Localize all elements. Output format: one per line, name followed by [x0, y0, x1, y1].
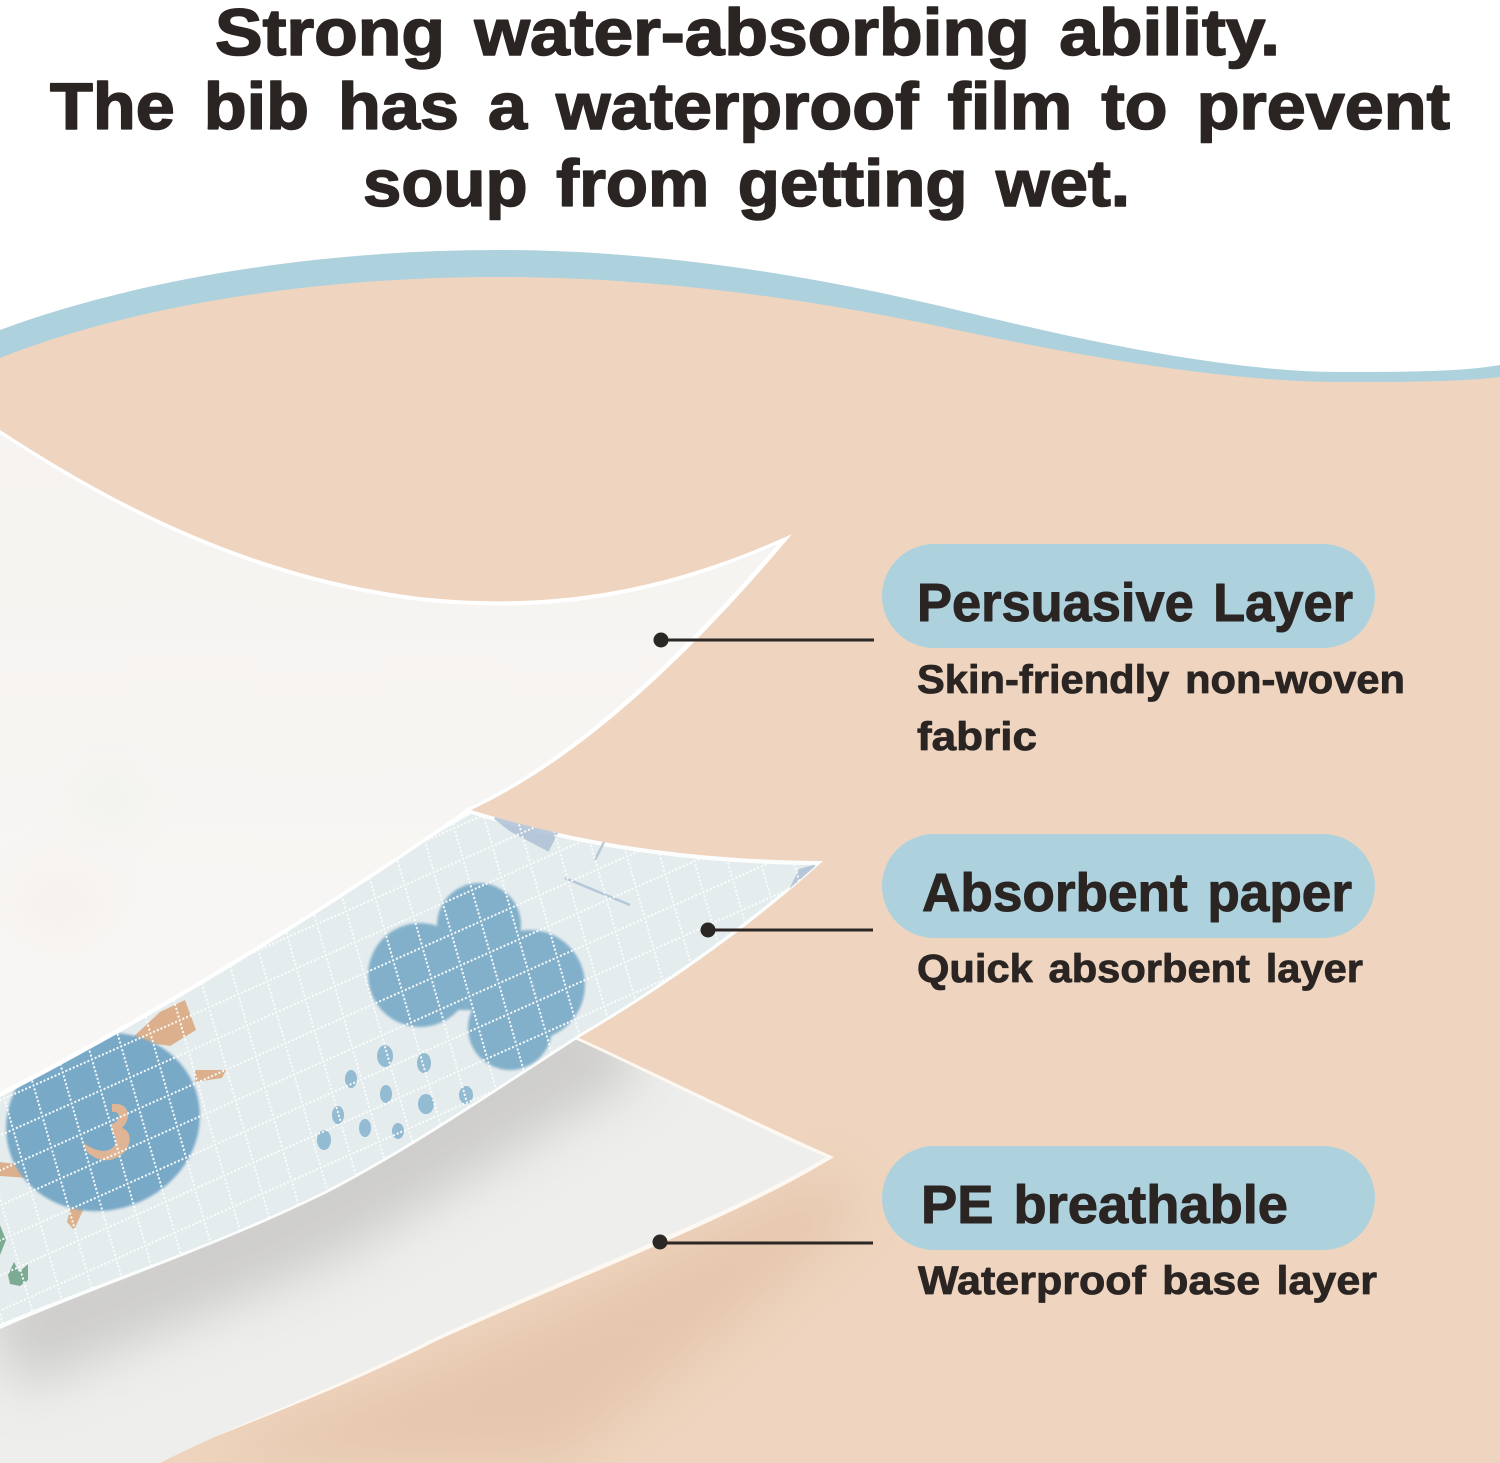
label: Persuasive Layer — [882, 544, 1405, 759]
icon: blue sheep — [0, 1000, 226, 1238]
layer: Absorbent paper — [0, 800, 830, 1340]
label: Persuasive Layer: fabric — [917, 715, 1037, 759]
soft shadow under the bottom layer — [190, 1170, 860, 1463]
icon: faint corner print — [495, 818, 815, 905]
faint print marks — [10, 780, 140, 935]
layer: PE breathable — [0, 1020, 834, 1463]
pill heading — [882, 834, 1375, 938]
label: PE breathable: PE breathable — [921, 1175, 1288, 1235]
description: Waterproof base layer — [918, 1259, 1377, 1303]
leader line: middle layer — [700, 922, 873, 938]
title: soup from getting wet. — [363, 146, 1130, 220]
pill heading — [882, 544, 1375, 648]
pill heading — [882, 1146, 1375, 1250]
icon: raindrops — [317, 1045, 473, 1150]
illustration: three bib layers — [0, 430, 874, 1463]
label: PE breathable — [882, 1146, 1377, 1303]
leader line: top layer — [654, 632, 874, 648]
title — [50, 0, 1450, 220]
icon: blue cloud — [368, 883, 585, 1070]
icon: green leaves — [0, 1225, 28, 1286]
title: The bib has a waterproof film to prevent — [50, 69, 1450, 143]
description: Quick absorbent layer — [917, 947, 1363, 991]
description: Skin-friendly non-woven — [917, 658, 1405, 702]
label: Absorbent paper — [882, 834, 1375, 991]
label: Persuasive Layer: Persuasive Layer — [917, 573, 1353, 633]
layer: Persuasive Layer — [0, 430, 792, 1097]
quilted grid pattern — [0, 800, 830, 1340]
label: Absorbent paper: Absorbent paper — [922, 863, 1352, 923]
leader line: bottom layer — [652, 1234, 873, 1250]
